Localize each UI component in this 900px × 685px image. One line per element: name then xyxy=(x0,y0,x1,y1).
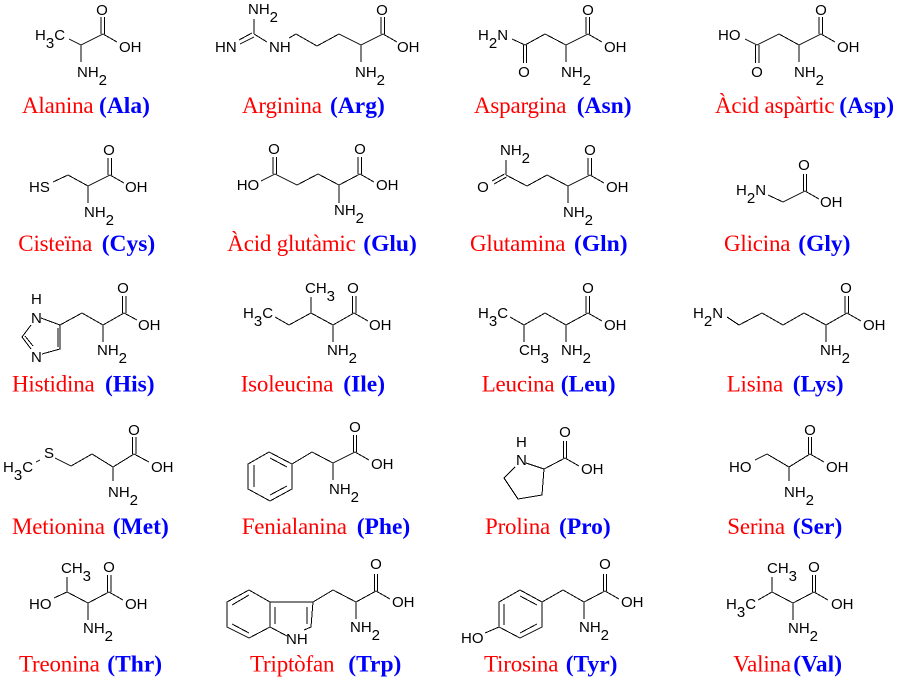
label: Lisina (Lys): Lisina xyxy=(727,372,783,397)
molecule: glutamine: NH xyxy=(500,142,522,159)
molecule: glycine: 2 xyxy=(747,190,755,207)
molecule: histidine: H xyxy=(31,291,42,308)
molecule: isoleucine: C xyxy=(262,305,273,322)
molecule: histidine: O xyxy=(117,280,129,297)
molecule: glutamic acid: OH xyxy=(376,177,398,194)
molecule: methionine: H xyxy=(3,459,14,476)
molecule: glycine xyxy=(736,157,842,211)
molecule: glutamic acid xyxy=(237,141,398,227)
molecule: tyrosine: HO xyxy=(461,630,484,647)
molecule: leucine: NH xyxy=(561,342,583,359)
label: Alanina (Ala): (Ala) xyxy=(99,93,150,119)
label: Treonina (Thr): Treonina xyxy=(19,652,100,677)
panel: Histidina xyxy=(12,280,160,398)
molecule: glutamic acid: NH xyxy=(334,202,356,219)
molecule: valine: H xyxy=(726,596,737,613)
molecule: methionine: S xyxy=(44,445,54,462)
molecule: histidine: NH xyxy=(97,342,119,359)
molecule: proline: H xyxy=(516,434,527,451)
molecule: tyrosine xyxy=(461,556,644,647)
panel: Isoleucina xyxy=(241,280,392,398)
molecule: methionine xyxy=(3,422,174,509)
molecule: arginine: 2 xyxy=(377,72,385,89)
molecule: cysteine: O xyxy=(103,142,115,159)
molecule: serine: HO xyxy=(729,459,752,476)
label: Triptòfan (Trp): Triptòfan xyxy=(250,652,335,677)
molecule: asparagine: OH xyxy=(604,39,626,56)
molecule: aspartic acid xyxy=(718,2,860,89)
molecule: isoleucine: 3 xyxy=(327,288,335,305)
panel: Glutamina xyxy=(470,142,628,257)
molecule: methionine: C xyxy=(22,459,33,476)
panel: Alanina xyxy=(22,2,150,119)
molecule: lysine: 2 xyxy=(842,350,850,367)
molecule: valine xyxy=(726,559,854,645)
molecule: lysine: NH xyxy=(820,342,842,359)
molecule: isoleucine: 3 xyxy=(254,313,262,330)
label: Prolina (Pro): Prolina xyxy=(485,514,550,539)
molecule: leucine: 3 xyxy=(541,350,549,367)
molecule: threonine: CH xyxy=(61,560,83,577)
label: Glutamina (Gln): Glutamina xyxy=(470,231,565,256)
molecule: valine: 3 xyxy=(737,604,745,621)
molecule: leucine: CH xyxy=(519,342,541,359)
label: Àcid glutàmic (Glu): Àcid glutàmic xyxy=(227,231,356,256)
panel: Prolina xyxy=(485,424,611,540)
molecule: lysine: O xyxy=(840,280,852,297)
molecule: aspartic acid: HO xyxy=(718,27,740,44)
molecule: proline: OH xyxy=(581,461,604,478)
molecule: glutamic acid: 2 xyxy=(356,210,364,227)
molecule: alanine: 2 xyxy=(99,72,107,89)
molecule: phenylalanine: O xyxy=(349,419,361,436)
label: Glutamina (Gln): (Gln) xyxy=(574,231,628,257)
molecule: alanine: NH xyxy=(77,64,99,81)
molecule: glutamine: 2 xyxy=(585,212,593,229)
molecule: tyrosine: O xyxy=(599,556,611,573)
panel: Cisteïna xyxy=(18,142,155,257)
molecule: leucine: C xyxy=(497,305,508,322)
label: Arginina (Arg): Arginina xyxy=(242,93,322,118)
molecule: isoleucine: NH xyxy=(327,342,349,359)
molecule: histidine: N xyxy=(31,310,42,327)
molecule: glutamine: OH xyxy=(606,179,628,196)
molecule: threonine: NH xyxy=(83,620,105,637)
label: Valina (Val): (Val) xyxy=(793,652,842,678)
molecule: cysteine xyxy=(29,142,148,229)
molecule: threonine: 3 xyxy=(83,568,91,585)
molecule: alanine: H xyxy=(35,27,46,44)
molecule: alanine: C xyxy=(54,27,65,44)
molecule: isoleucine: OH xyxy=(369,317,392,334)
label: Histidina (His): Histidina xyxy=(12,372,95,397)
label: Isoleucina (Ile): (Ile) xyxy=(343,372,385,398)
molecule: arginine xyxy=(215,1,420,89)
panel: Àcid aspàrtic xyxy=(715,2,894,119)
label: Àcid aspàrtic (Asp): (Asp) xyxy=(839,93,894,119)
panel: Triptòfan xyxy=(227,556,414,678)
molecule: asparagine: N xyxy=(497,27,508,44)
label: Àcid glutàmic (Glu): (Glu) xyxy=(363,231,417,257)
panel: Fenialanina xyxy=(242,419,410,540)
molecule: methionine: 2 xyxy=(130,492,138,509)
molecule: cysteine: OH xyxy=(125,179,148,196)
molecule: phenylalanine xyxy=(248,419,394,506)
molecule: asparagine: 2 xyxy=(583,72,591,89)
label: Metionina (Met): (Met) xyxy=(113,514,169,540)
molecule: lysine: OH xyxy=(863,317,886,334)
molecule: isoleucine: H xyxy=(243,305,254,322)
molecule: isoleucine: CH xyxy=(305,280,327,297)
molecule: tyrosine: NH xyxy=(579,619,601,636)
label: Glicina (Gly): (Gly) xyxy=(798,231,851,257)
molecule: valine: CH xyxy=(767,560,789,577)
molecule: phenylalanine: NH xyxy=(329,481,351,498)
label: Triptòfan (Trp): (Trp) xyxy=(348,652,401,678)
label: Leucina (Leu): Leucina xyxy=(482,372,554,397)
molecule: asparagine: O xyxy=(518,64,530,81)
panel: Serina xyxy=(727,422,848,540)
molecule: arginine: 2 xyxy=(270,9,278,26)
molecule: arginine: HN xyxy=(215,39,237,56)
label: Alanina (Ala): Alanina xyxy=(22,93,93,118)
molecule: lysine: H xyxy=(693,305,704,322)
molecule: leucine: 3 xyxy=(489,313,497,330)
panel: Glicina xyxy=(724,157,851,257)
molecule: cysteine: 2 xyxy=(106,212,114,229)
molecule: methionine: OH xyxy=(151,459,174,476)
molecule: glutamine: O xyxy=(584,142,596,159)
molecule: arginine: O xyxy=(376,2,388,19)
molecule: valine: O xyxy=(808,559,820,576)
label: Serina (Ser): Serina xyxy=(727,514,785,539)
label: Fenialanina (Phe): Fenialanina xyxy=(242,514,347,539)
molecule: arginine: NH xyxy=(269,39,291,56)
molecule: lysine: 2 xyxy=(704,313,712,330)
label: Treonina (Thr): (Thr) xyxy=(107,652,162,678)
label: Isoleucina (Ile): Isoleucina xyxy=(241,372,333,397)
label: Leucina (Leu): (Leu) xyxy=(561,372,616,398)
molecule: tyrosine: 2 xyxy=(601,627,609,644)
panel: Tirosina xyxy=(461,556,644,678)
label: Cisteïna (Cys): (Cys) xyxy=(102,231,155,257)
panel: Arginina xyxy=(215,1,420,119)
label: Histidina (His): (His) xyxy=(105,372,155,398)
molecule: valine: C xyxy=(745,596,756,613)
molecule: cysteine: NH xyxy=(84,204,106,221)
label: Valina (Val): Valina xyxy=(733,652,791,677)
molecule: lysine xyxy=(693,280,886,367)
molecule: glutamic acid: O xyxy=(354,141,366,158)
molecule: alanine: O xyxy=(96,2,108,19)
molecule: threonine: HO xyxy=(29,596,52,613)
molecule: serine xyxy=(729,422,848,509)
molecule: alanine xyxy=(35,2,142,89)
molecule: arginine: NH xyxy=(355,64,377,81)
label: Glicina (Gly): Glicina xyxy=(724,231,790,256)
molecule: glycine: N xyxy=(755,182,766,199)
label: Àcid aspàrtic (Asp): Àcid aspàrtic xyxy=(715,93,834,118)
molecule: threonine: 2 xyxy=(105,628,113,645)
molecule: threonine: OH xyxy=(125,596,148,613)
molecule: proline xyxy=(504,424,604,499)
label: Lisina (Lys): (Lys) xyxy=(793,372,844,398)
label: Arginina (Arg): (Arg) xyxy=(330,93,385,119)
label: Aspargina (Asn): Aspargina xyxy=(474,93,566,118)
panel: Valina xyxy=(726,559,854,678)
molecule: glycine: H xyxy=(736,182,747,199)
molecule: methionine: 3 xyxy=(14,467,22,484)
molecule: histidine: N xyxy=(31,349,42,366)
molecule: tryptophan: NH xyxy=(286,631,308,648)
molecule: leucine xyxy=(478,280,626,367)
molecule: glutamine: 2 xyxy=(522,150,530,167)
molecule: tryptophan: O xyxy=(370,556,382,573)
molecule: leucine: OH xyxy=(604,317,626,334)
molecule: leucine: O xyxy=(582,280,594,297)
molecule: histidine xyxy=(22,280,160,367)
molecule: asparagine: 2 xyxy=(489,35,497,52)
molecule: proline: N xyxy=(516,452,527,469)
panel: Treonina xyxy=(19,559,162,678)
molecule: proline: O xyxy=(559,424,571,441)
molecule: serine: NH xyxy=(784,484,806,501)
molecule: valine: 3 xyxy=(789,568,797,585)
label: Tirosina (Tyr): Tirosina xyxy=(484,652,558,677)
molecule: isoleucine xyxy=(243,280,392,367)
molecule: aspartic acid: NH xyxy=(794,64,816,81)
molecule: threonine: O xyxy=(103,559,115,576)
label: Fenialanina (Phe): (Phe) xyxy=(357,514,410,540)
molecule: tryptophan xyxy=(227,556,414,648)
molecule: glutamic acid: HO xyxy=(237,177,259,194)
molecule: leucine: H xyxy=(478,305,489,322)
panel: Aspargina xyxy=(474,2,632,119)
label: Tirosina (Tyr): (Tyr) xyxy=(566,652,617,678)
molecule: methionine: NH xyxy=(108,484,130,501)
molecule: histidine: 2 xyxy=(119,350,127,367)
panel: Àcid glutàmic xyxy=(227,141,417,257)
molecule: lysine: N xyxy=(712,305,723,322)
molecule: aspartic acid: O xyxy=(815,2,827,19)
molecule: valine: 2 xyxy=(810,628,818,645)
molecule: serine: 2 xyxy=(806,492,814,509)
molecule: glutamine: O xyxy=(477,179,489,196)
molecule: tyrosine: OH xyxy=(621,594,644,611)
label: Aspargina (Asn): (Asn) xyxy=(577,93,632,119)
molecule: isoleucine: 2 xyxy=(349,350,357,367)
molecule: aspartic acid: O xyxy=(751,64,763,81)
molecule: arginine: OH xyxy=(397,39,420,56)
molecule: serine: O xyxy=(804,422,816,439)
molecule: asparagine: NH xyxy=(561,64,583,81)
molecule: leucine: 2 xyxy=(583,350,591,367)
molecule: tryptophan: 2 xyxy=(372,627,380,644)
molecule: threonine xyxy=(29,559,148,645)
molecule: cysteine: HS xyxy=(29,179,50,196)
label: Serina (Ser): (Ser) xyxy=(793,514,842,540)
panel: Metionina xyxy=(3,422,174,540)
molecule: alanine: 3 xyxy=(46,35,54,52)
molecule: phenylalanine: OH xyxy=(371,456,394,473)
molecule: phenylalanine: 2 xyxy=(351,489,359,506)
label: Metionina (Met): Metionina xyxy=(12,514,105,539)
molecule: valine: OH xyxy=(831,596,854,613)
molecule: tryptophan: NH xyxy=(350,619,372,636)
molecule: asparagine: O xyxy=(582,2,594,19)
molecule: aspartic acid: 2 xyxy=(816,72,824,89)
molecule: tryptophan: OH xyxy=(392,594,414,611)
panel: Leucina xyxy=(478,280,626,398)
molecule: aspartic acid: OH xyxy=(837,39,860,56)
molecule: isoleucine: O xyxy=(347,280,359,297)
panel: Lisina xyxy=(693,280,886,398)
molecule: glutamine xyxy=(477,142,628,229)
molecule: glutamic acid: O xyxy=(268,141,280,158)
molecule: glycine: O xyxy=(798,157,810,174)
label: Prolina (Pro): (Pro) xyxy=(559,514,611,540)
molecule: histidine: OH xyxy=(138,317,160,334)
molecule: serine: OH xyxy=(826,459,848,476)
molecule: asparagine xyxy=(478,2,626,89)
label: Cisteïna (Cys): Cisteïna xyxy=(18,231,92,256)
molecule: arginine: NH xyxy=(248,1,270,18)
molecule: valine: NH xyxy=(788,620,810,637)
molecule: alanine: OH xyxy=(119,39,142,56)
molecule: asparagine: H xyxy=(478,27,489,44)
molecule: methionine: O xyxy=(128,422,140,439)
molecule: glycine: OH xyxy=(820,194,842,211)
molecule: glutamine: NH xyxy=(563,204,585,221)
